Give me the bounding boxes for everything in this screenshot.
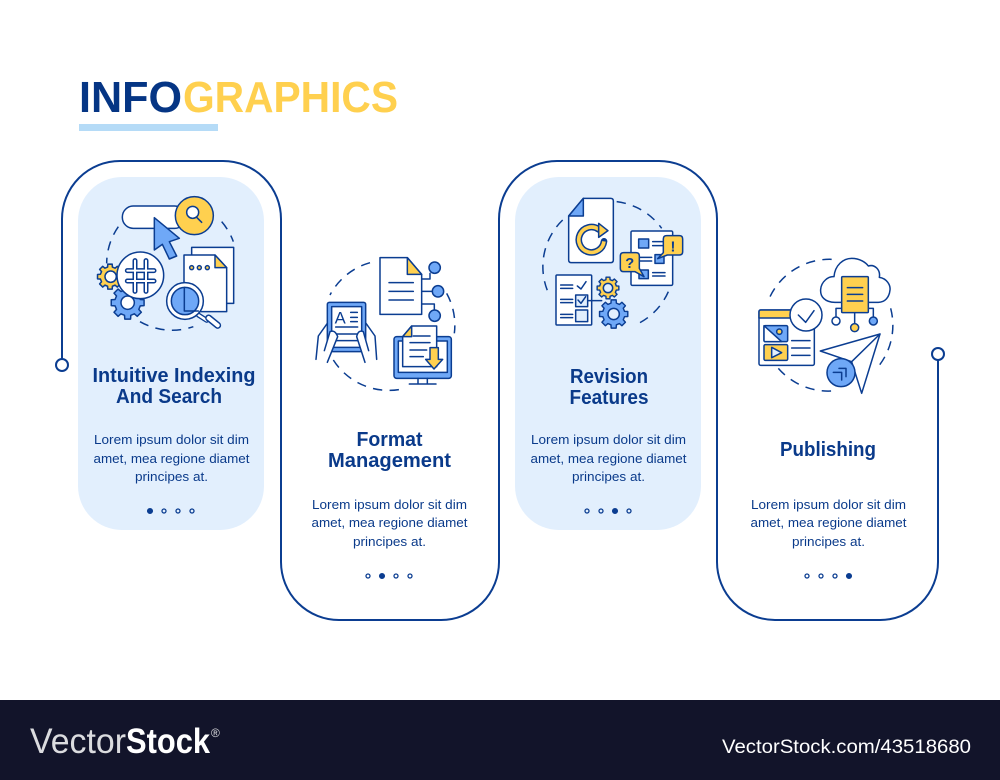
icon: publishing	[759, 258, 893, 393]
page dots: step 3	[585, 509, 631, 513]
text block: step 4	[750, 497, 907, 549]
serpentine outline connecting the steps	[62, 161, 938, 620]
text block: step 2	[312, 497, 468, 549]
text block: step 3: Lorem ipsum dolor sit dim	[531, 432, 686, 447]
heading: step 4: Publishing	[780, 439, 876, 461]
footer logo: ®	[211, 726, 220, 740]
text block: step 2: principes at.	[353, 534, 426, 549]
text block: step 2: amet, mea regione diamet	[312, 515, 468, 530]
heading: step 1	[92, 365, 256, 408]
outline start node	[56, 359, 68, 371]
outline end node	[932, 348, 944, 360]
text block: step 4: amet, mea regione diamet	[750, 515, 907, 530]
text block: step 1	[94, 432, 250, 484]
icon: format management	[316, 258, 455, 390]
footer logo	[30, 722, 220, 761]
heading: step 1: Intuitive Indexing	[92, 365, 256, 387]
title: INFO	[79, 73, 182, 122]
page dots: step 2	[366, 574, 412, 578]
page dots: step 1	[148, 509, 194, 513]
footer image id: VectorStock.com/43518680	[722, 737, 971, 758]
icon: revision features: ?	[625, 256, 634, 272]
title: GRAPHICS	[183, 73, 398, 122]
footer logo: Stock	[126, 722, 210, 761]
heading: step 3: Features	[570, 387, 648, 409]
text block: step 3: principes at.	[572, 469, 645, 484]
panel background: step 3	[515, 177, 701, 530]
panel background: step 1	[78, 177, 264, 530]
heading: step 2	[328, 429, 451, 472]
icon: indexing and search	[98, 197, 234, 330]
text block: step 4: principes at.	[792, 534, 865, 549]
title underline	[79, 124, 218, 131]
text block: step 1: amet, mea regione diamet	[94, 451, 250, 466]
text block: step 2: Lorem ipsum dolor sit dim	[312, 497, 467, 512]
page dots: step 4	[805, 574, 851, 578]
text block: step 1: Lorem ipsum dolor sit dim	[94, 432, 249, 447]
footer logo: Vector	[30, 722, 126, 761]
title	[79, 73, 398, 122]
icon: format management: A	[335, 308, 347, 327]
heading: step 2: Format	[356, 429, 423, 451]
text block: step 4: Lorem ipsum dolor sit dim	[751, 497, 906, 512]
icon: revision features	[543, 198, 683, 328]
heading: step 3: Revision	[570, 366, 648, 388]
text block: step 3	[530, 432, 687, 484]
heading: step 1: And Search	[116, 386, 222, 408]
footer bar	[0, 700, 1000, 780]
text block: step 1: principes at.	[135, 469, 208, 484]
heading: step 2: Management	[328, 450, 451, 472]
icon: revision features: !	[671, 240, 675, 256]
heading: step 3	[570, 366, 648, 409]
text block: step 3: amet, mea regione diamet	[530, 451, 687, 466]
